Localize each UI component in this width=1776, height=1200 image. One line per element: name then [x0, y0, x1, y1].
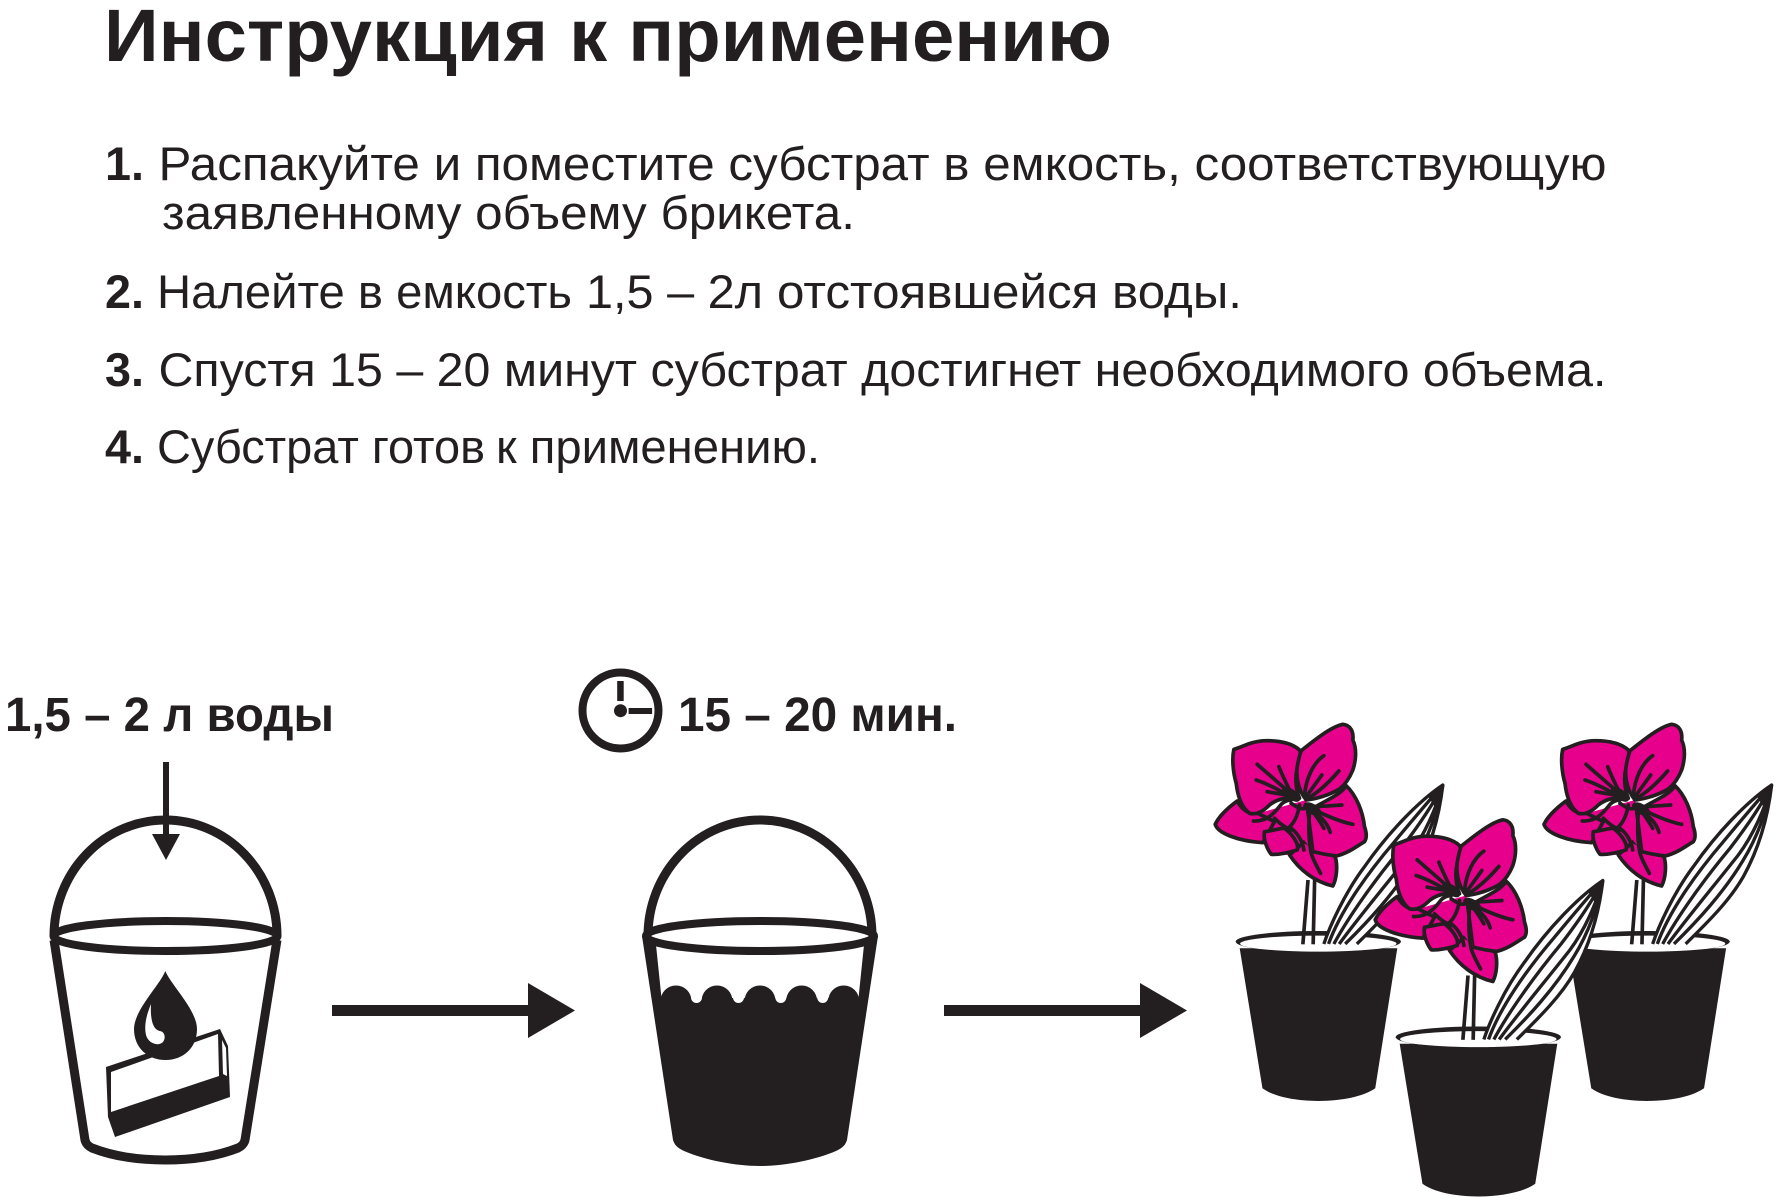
step 1: 1.: [105, 138, 144, 191]
step 4: Субстрат готов: [157, 421, 485, 474]
step 1: Распакуйте и поместите субстрат в емкость, соответствующую: [158, 138, 1606, 191]
icon: bucket with briquette and water drop: [54, 820, 278, 1160]
step 1: [105, 138, 1606, 240]
step 4: [105, 421, 820, 474]
arrow: step two to step three: [944, 983, 1187, 1038]
step 2: Налейте в емкость: [157, 266, 572, 319]
plant: centre orchid: [1375, 820, 1603, 1196]
step 3: Спустя 15 – 20 минут субстрат достигнет необходимого объема.: [158, 344, 1606, 397]
step 2: отстоявшейся воды.: [777, 266, 1242, 319]
icon: bucket with expanded substrate: [642, 820, 878, 1166]
label: water amount: 1,5 – 2 л воды: [5, 689, 334, 742]
step 1: заявленному объему брикета.: [162, 187, 855, 240]
step 2: 1,5 – 2л: [586, 266, 763, 319]
icon: briquette: [106, 1029, 230, 1137]
icon: clock: [582, 672, 658, 748]
label: soak time: 15 – 20 мин.: [678, 689, 957, 742]
instructions text block: [105, 138, 1606, 474]
icon: arrow down into bucket: [152, 762, 180, 860]
step 4: 4.: [105, 421, 144, 474]
plant: right orchid: [1544, 724, 1772, 1101]
plant: left orchid: [1215, 724, 1443, 1101]
step 2: 2.: [105, 266, 144, 319]
step 3: 3.: [105, 344, 144, 397]
step 4: к применению.: [496, 421, 820, 474]
icon: water drop: [134, 971, 197, 1060]
arrow: step one to step two: [332, 983, 575, 1038]
step 2: [105, 266, 1242, 319]
illustration: three potted orchids: [1215, 724, 1772, 1196]
